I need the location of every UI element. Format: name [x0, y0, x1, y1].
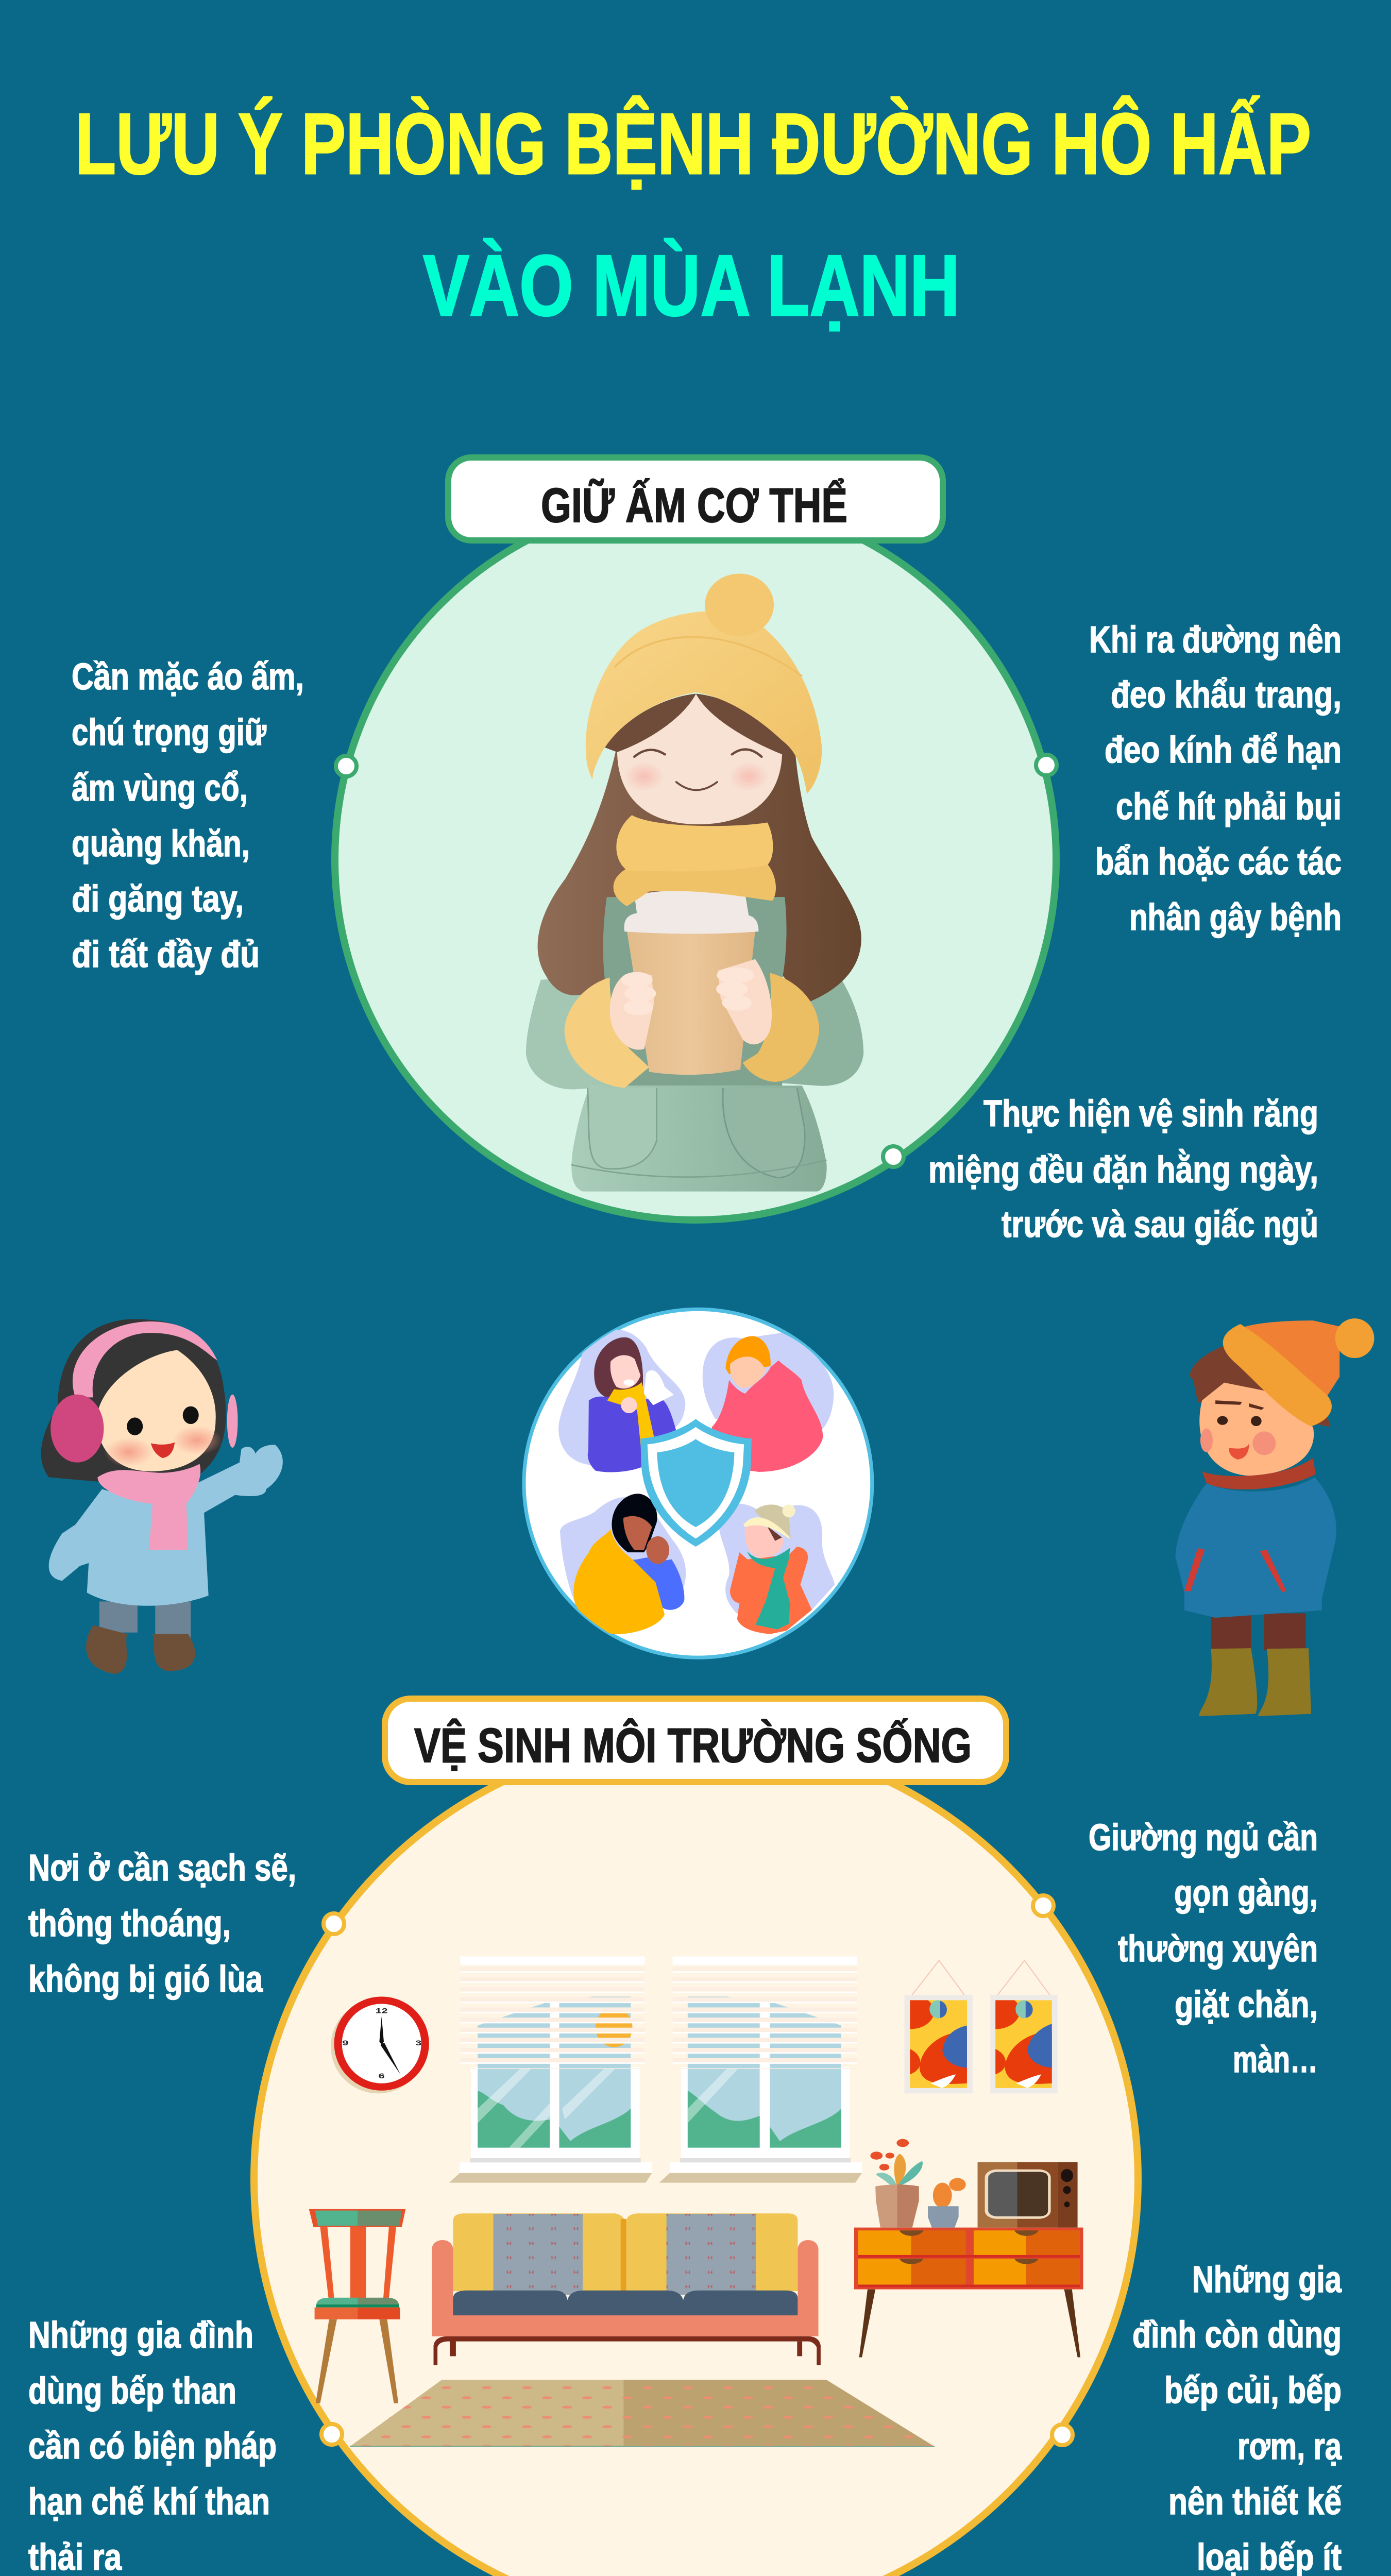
text: tidy bed: màn… [1233, 2039, 1318, 2080]
text: charcoal stove: dùng bếp than [28, 2370, 236, 2412]
text: oral hygiene [928, 1093, 1318, 1245]
text: wood stove: Những gia [1192, 2259, 1342, 2300]
node dot lower left [321, 2424, 342, 2445]
node dot lower right [1052, 2425, 1073, 2445]
text: wood stove: bếp củi, bếp [1164, 2370, 1342, 2411]
text: oral hygiene: miệng đều đặn hằng ngày, [928, 1149, 1318, 1191]
text: warm clothing: Cần mặc áo ấm, [72, 656, 304, 698]
text: mask and glasses: nhân gây bệnh [1129, 897, 1342, 938]
text: warm clothing: đi găng tay, [72, 878, 244, 920]
television [978, 2162, 1078, 2228]
text: wood stove: rơm, rạ [1237, 2426, 1342, 2467]
clock [331, 1996, 429, 2093]
rug [350, 2380, 935, 2447]
text: mask and glasses: chế hít phải bụi [1116, 786, 1342, 827]
clock: 3 [415, 2039, 421, 2047]
window right [659, 1957, 862, 2183]
title [75, 95, 1311, 334]
text: charcoal stove [28, 2315, 277, 2576]
illustration: girl with coffee cup [526, 573, 863, 1192]
plants [870, 2139, 966, 2228]
node dot left [336, 756, 357, 776]
text: mask and glasses [1089, 619, 1342, 938]
node dot upper left [324, 1913, 344, 1934]
circle panel [254, 1737, 1138, 2576]
title: VÀO MÙA LẠNH [423, 237, 960, 334]
text: clean home: thông thoáng, [28, 1903, 231, 1944]
text: tidy bed: gọn gàng, [1174, 1873, 1318, 1914]
panel: clean living environment [254, 1699, 1138, 2576]
window left [449, 1957, 652, 2183]
heading: keep warm: GIỮ ẤM CƠ THỂ [541, 478, 847, 532]
text: tidy bed: Giường ngủ cần [1089, 1817, 1318, 1858]
picture left [905, 1960, 973, 2093]
text: tidy bed [1089, 1817, 1318, 2080]
clock: 6 [379, 2072, 385, 2080]
sideboard [854, 2228, 1083, 2357]
text: charcoal stove: hạn chế khí than [28, 2481, 270, 2522]
clock: 9 [342, 2039, 348, 2047]
text: charcoal stove: Những gia đình [28, 2315, 253, 2356]
text: oral hygiene: trước và sau giấc ngủ [1002, 1204, 1318, 1245]
text: wood stove: đình còn dùng [1132, 2314, 1342, 2355]
clock: 12 [376, 2007, 388, 2015]
text: warm clothing: ấm vùng cổ, [72, 768, 248, 809]
illustration: boy with hat [1176, 1318, 1374, 1716]
sofa [432, 2213, 821, 2365]
text: clean home: không bị gió lùa [28, 1959, 263, 2000]
illustration: girl with earmuffs [41, 1319, 283, 1674]
text: warm clothing [72, 656, 304, 975]
text: tidy bed: thường xuyên [1118, 1928, 1318, 1970]
text: clean home [28, 1848, 296, 2000]
illustration: living room [309, 1957, 1083, 2447]
text: warm clothing: quàng khăn, [72, 823, 250, 865]
text: warm clothing: đi tất đầy đủ [72, 934, 260, 975]
node dot upper right [1033, 1895, 1054, 1916]
heading: clean environment [385, 1699, 1006, 1782]
text: wood stove: nên thiết kế [1168, 2481, 1342, 2522]
text: clean home: Nơi ở cần sạch sẽ, [28, 1848, 296, 1889]
text: tidy bed: giặt chăn, [1175, 1984, 1318, 2025]
heading: clean environment: VỆ SINH MÔI TRƯỜNG SỐNG [414, 1718, 972, 1772]
chair [309, 2209, 405, 2403]
text: wood stove [1132, 2259, 1342, 2576]
text: warm clothing: chú trọng giữ [72, 712, 267, 753]
panel: keep body warm [335, 457, 1057, 1220]
text: mask and glasses: đeo khẩu trang, [1111, 674, 1342, 716]
circle panel [335, 499, 1056, 1220]
illustration: sick people with shield [524, 1309, 872, 1657]
node dot right [1036, 755, 1057, 775]
picture right [990, 1960, 1058, 2093]
text: oral hygiene: Thực hiện vệ sinh răng [983, 1093, 1318, 1134]
text: mask and glasses: bẩn hoặc các tác [1095, 841, 1342, 883]
text: mask and glasses: đeo kính để hạn [1105, 730, 1342, 771]
node dot bottom [883, 1146, 904, 1167]
heading: keep warm [448, 457, 943, 540]
text: charcoal stove: cần có biện pháp [28, 2426, 277, 2467]
